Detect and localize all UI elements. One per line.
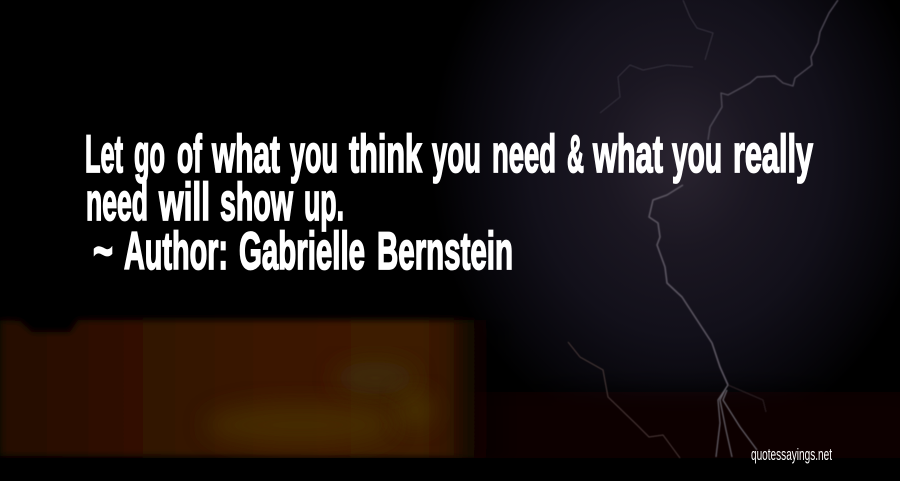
quote line 1: go <box>134 125 165 184</box>
watermark: quotessayings.net <box>751 445 832 464</box>
quote line 2: will <box>158 173 210 232</box>
author line <box>93 222 513 281</box>
quote line 1 <box>85 125 813 184</box>
author line: Bernstein <box>377 222 513 281</box>
quote line 1: you <box>432 125 481 184</box>
author line: Gabrielle <box>239 222 365 281</box>
quote line 1: need <box>492 125 556 184</box>
author line: Author: <box>124 222 228 281</box>
quote line 2: need <box>86 173 148 232</box>
lightning: main bolt <box>649 0 838 457</box>
quote line 1: you <box>672 125 722 184</box>
quote line 1: you <box>290 125 338 184</box>
quote line 1: think <box>349 125 422 184</box>
quote line 2 <box>86 173 344 232</box>
quote text <box>85 125 813 281</box>
quote line 1: really <box>733 125 813 184</box>
background: orange horizon band <box>0 320 900 481</box>
lightning: lower left bolt <box>568 342 680 458</box>
quote line 1: of <box>177 125 202 184</box>
quote line 1: what <box>211 125 280 184</box>
quote line 2: up. <box>304 173 344 232</box>
author line: ~ <box>93 222 113 281</box>
quote line 1: & <box>567 125 584 184</box>
quote line 1: Let <box>85 125 123 184</box>
quote line 2: show <box>220 173 293 232</box>
lightning: upper side branch <box>600 0 713 113</box>
background: purple storm glow <box>430 0 900 450</box>
quote line 1: what <box>592 125 663 184</box>
